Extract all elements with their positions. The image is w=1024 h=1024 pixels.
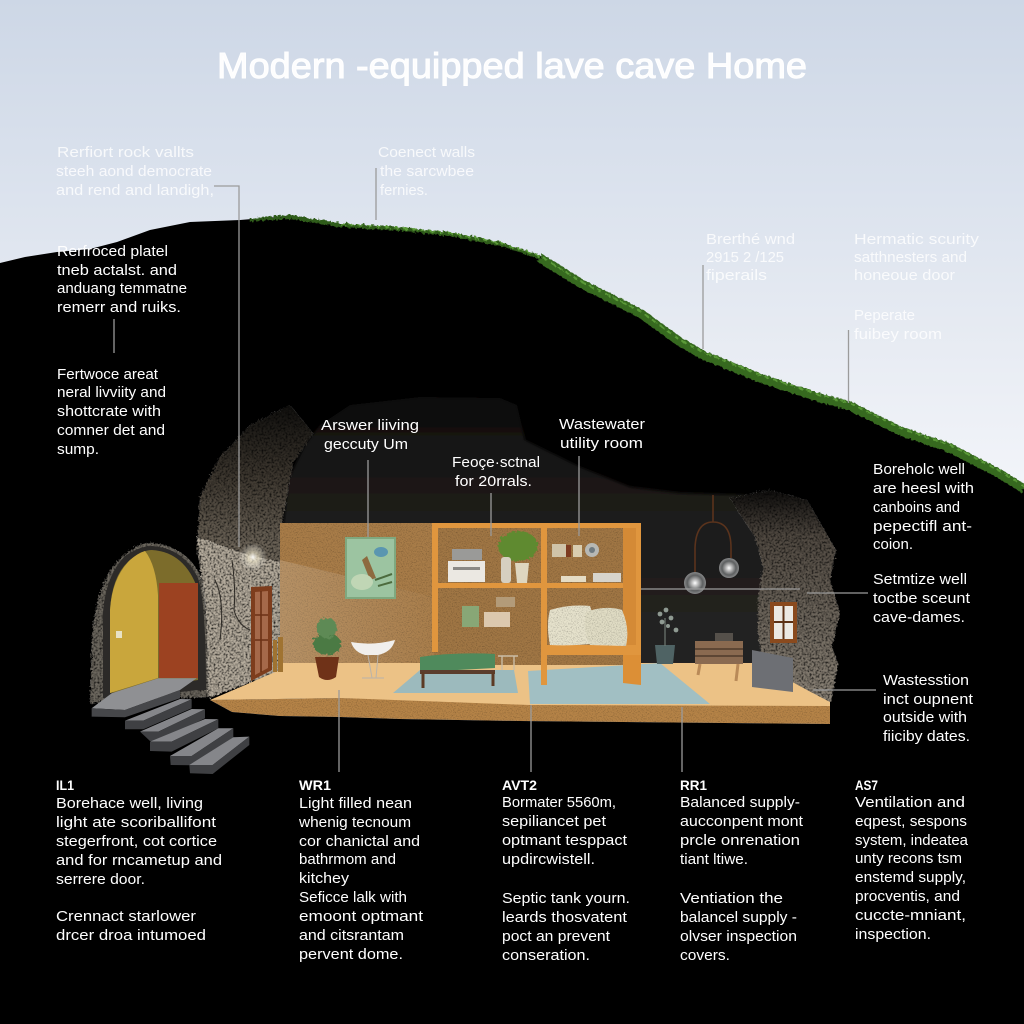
- rock cracks: [215, 560, 268, 650]
- bottom column: IL1: light ate scoriballifont: [56, 814, 217, 831]
- interior label: wastewater utility room: [559, 416, 645, 452]
- arch back wall: [110, 550, 198, 693]
- sky callout: separate room: [854, 307, 942, 343]
- sky callout: separate room: fuibey room: [854, 326, 942, 343]
- bottom column: AS7: system, indeatea: [855, 832, 969, 849]
- sky callout: rock walls: steeh aond democrate: [56, 163, 212, 180]
- bottom column: WR1: bathrmom and: [299, 851, 396, 868]
- dark cave back wall: [283, 397, 770, 668]
- arch stone frame: [90, 543, 208, 704]
- bottom column: IL1: stegerfront, cot cortice: [56, 833, 217, 850]
- left rock wall (lit area): [197, 537, 281, 698]
- light switch: [116, 631, 122, 638]
- bottom column: AS7: [855, 777, 969, 943]
- bottom column: AVT2: Bormater 5560m,: [502, 794, 616, 811]
- bottom column: IL1: IL1: [56, 777, 74, 793]
- bottom column: AS7: cuccte-mniant,: [855, 907, 966, 924]
- wooden shelving unit: [432, 523, 641, 685]
- bottom column: AVT2: poct an prevent: [502, 928, 611, 945]
- sky callout: breathing wind: fiperails: [706, 267, 767, 284]
- left callout: shotcrete: Fertwoce areat: [57, 366, 159, 383]
- large rug: [528, 663, 710, 704]
- right callout: setmtize well: Setmtize well: [873, 571, 967, 588]
- arch dark inner rim: [103, 546, 206, 700]
- bottom column: AS7: eqpest, sespons: [855, 813, 967, 830]
- vase with dried flowers: [655, 608, 678, 664]
- wall lamp glow: [239, 543, 267, 571]
- sky callout: connect walls: the sarcwbee: [380, 163, 474, 180]
- interior label: sectional: for 20rrals.: [455, 473, 532, 490]
- bottom column: AVT2: Septic tank yourn.: [502, 890, 630, 907]
- interior label: wastewater utility room: Wastewater: [559, 416, 645, 433]
- bottom column: AS7: Ventilation and: [855, 794, 965, 811]
- sky callout: rock walls: Rerfiort rock vallts: [57, 144, 194, 161]
- sky callout: separate room: Peperate: [854, 307, 915, 324]
- bottom column: AVT2: updircwistell.: [502, 851, 595, 868]
- right callout: borehole well: pepectifl ant-: [873, 518, 972, 535]
- sky callout: rock walls: and rend and landigh,: [56, 182, 214, 199]
- sky callout: rock walls: [56, 144, 214, 199]
- hill cross-section: [0, 216, 1024, 1024]
- sky callout: connect walls: Coenect walls: [378, 144, 475, 161]
- left rock wall (dim): [197, 405, 313, 698]
- bottom column: RR1: aucconpent mont: [680, 813, 804, 830]
- bottom column: IL1: [56, 777, 222, 944]
- shelf back panel: [434, 525, 639, 665]
- bottom column: WR1: WR1: [299, 777, 331, 793]
- bottom column: WR1: [298, 777, 424, 963]
- right callout: wastestation: fiiciby dates.: [883, 728, 970, 745]
- left callout: reinforced plate: [57, 243, 187, 316]
- interior label: wastewater utility room: utility room: [560, 435, 643, 452]
- sky callout: breathing wind: [706, 231, 795, 284]
- left callout: reinforced plate: remerr and ruiks.: [57, 299, 181, 316]
- bottom column: WR1: Seficce lalk with: [299, 889, 407, 906]
- sky callout: hermetic security: [854, 231, 980, 284]
- wall painting: [345, 537, 396, 599]
- left callout: shotcrete: comner det and: [57, 422, 165, 439]
- right callout: wastestation: inct oupnent: [883, 691, 974, 708]
- bottom column: RR1: olvser inspection: [680, 928, 797, 945]
- bottom column: AS7: inspection.: [855, 926, 931, 943]
- potted plant: [313, 618, 341, 680]
- sky callout: breathing wind: Brerthé wnd: [706, 231, 795, 248]
- bottom column: WR1: emoont optmant: [299, 908, 424, 925]
- wooden dresser: [695, 633, 743, 681]
- right callout: borehole well: [873, 461, 974, 553]
- small pictures: [462, 597, 515, 627]
- bottom column: IL1: drcer droa intumoed: [56, 927, 206, 944]
- printer: [448, 549, 485, 582]
- floor slab: [210, 663, 830, 724]
- bottom column: AS7: procventis, and: [855, 888, 960, 905]
- cushions: [548, 606, 627, 646]
- left callout: reinforced plate: anduang temmatne: [57, 280, 187, 297]
- white basin: [351, 640, 395, 678]
- leader lines: [114, 168, 876, 772]
- bottom column: RR1: prcle onrenation: [680, 832, 800, 849]
- bottom column: AVT2: sepiliancet pet: [502, 813, 607, 830]
- bottom column: RR1: RR1: [680, 777, 707, 793]
- yellow left wall: [110, 551, 158, 693]
- side door: [251, 586, 272, 681]
- grey utility box: [752, 650, 793, 692]
- sky callout: connect walls: fernies.: [380, 182, 428, 199]
- left callout: shotcrete: neral livviity and: [57, 384, 166, 401]
- leaning wood planks: [273, 637, 283, 672]
- bottom column: IL1: Borehace well, living: [56, 795, 203, 812]
- title: Modern -equipped lave cave Home: [217, 45, 807, 86]
- right callout: borehole well: coion.: [873, 536, 913, 553]
- bottom column: WR1: pervent dome.: [299, 946, 403, 963]
- bottom column: AVT2: leards thosvatent: [502, 909, 628, 926]
- bottom column: WR1: Light filled nean: [299, 795, 412, 812]
- interior label: sectional: Feoçe·sctnal: [452, 454, 540, 471]
- bottom column: AS7: AS7: [855, 777, 878, 793]
- green bench: [420, 653, 495, 688]
- right callout: setmtize well: toctbe sceunt: [873, 590, 971, 607]
- left callout: shotcrete: shottcrate with: [57, 403, 161, 420]
- bottom column: RR1: Balanced supply-: [680, 794, 800, 811]
- bottom column: AVT2: AVT2: [502, 777, 537, 793]
- side table: [498, 656, 518, 670]
- bottom column: RR1: tiant ltiwe.: [680, 851, 748, 868]
- interior label: living: [321, 417, 419, 453]
- right callout: borehole well: are heesl with: [873, 480, 974, 497]
- bottom column: RR1: balancel supply -: [680, 909, 797, 926]
- plants in vases: [498, 531, 538, 583]
- books and disc: [552, 543, 621, 582]
- bottom column: IL1: and for rncametup and: [56, 852, 222, 869]
- right callout: wastestation: Wastesstion: [883, 672, 969, 689]
- red door: [159, 583, 198, 678]
- right callout: wastestation: [883, 672, 974, 745]
- entrance arch: [90, 543, 208, 704]
- bottom column: WR1: whenig tecnoum: [298, 814, 411, 831]
- bottom column: AVT2: conseration.: [502, 947, 590, 964]
- bottom column: RR1: [680, 777, 804, 964]
- left callout: reinforced plate: tneb actalst. and: [57, 262, 177, 279]
- bottom column: WR1: kitchey: [299, 870, 350, 887]
- rock window: [770, 602, 797, 643]
- light beam from wall lamp: [280, 560, 434, 672]
- left callout: reinforced plate: Rerfroced platel: [57, 243, 168, 260]
- bottom column: RR1: Ventiation the: [680, 890, 783, 907]
- interior label: living: geccuty Um: [324, 436, 408, 453]
- interior label: living: Arswer liiving: [321, 417, 419, 434]
- sky callout: connect walls: [378, 144, 475, 199]
- left callout: shotcrete: sump.: [57, 441, 99, 458]
- right callout: borehole well: canboins and: [873, 499, 960, 516]
- interior label: sectional: [452, 454, 540, 490]
- hanging lamps: [684, 495, 739, 594]
- bottom column: WR1: cor chanictal and: [299, 833, 420, 850]
- right rock wall: [730, 490, 840, 702]
- sky callout: hermetic security: honeoue door: [854, 267, 955, 284]
- bottom column: AS7: unty recons tsm: [855, 850, 962, 867]
- shelf frame: [432, 523, 641, 685]
- right callout: borehole well: Boreholc well: [873, 461, 965, 478]
- right callout: wastestation: outside with: [883, 709, 967, 726]
- bottom column: IL1: serrere door.: [56, 871, 145, 888]
- entrance stairs: [92, 678, 249, 774]
- grass along the ridge: [250, 217, 1024, 489]
- sky callout: breathing wind: 2915 2 /125: [706, 249, 784, 266]
- sky callout: hermetic security: Hermatic scurity: [854, 231, 980, 248]
- bottom column: WR1: and citsrantam: [299, 927, 404, 944]
- sand back wall: [280, 523, 440, 673]
- bottom column: AVT2: [502, 777, 630, 964]
- bottom column: IL1: Crennact starlower: [56, 908, 196, 925]
- bottom column: RR1: covers.: [680, 947, 730, 964]
- bottom column: AS7: enstemd supply,: [855, 869, 966, 886]
- bottom column: AVT2: optmant tesppact: [502, 832, 628, 849]
- sky callout: hermetic security: satthnesters and: [854, 249, 967, 266]
- right callout: setmtize well: cave-dames.: [873, 609, 965, 626]
- right callout: setmtize well: [873, 571, 971, 626]
- rug under bench: [393, 670, 518, 693]
- right side panel: [623, 528, 636, 645]
- left callout: shotcrete: [57, 366, 166, 458]
- cave interior scene: [90, 397, 840, 774]
